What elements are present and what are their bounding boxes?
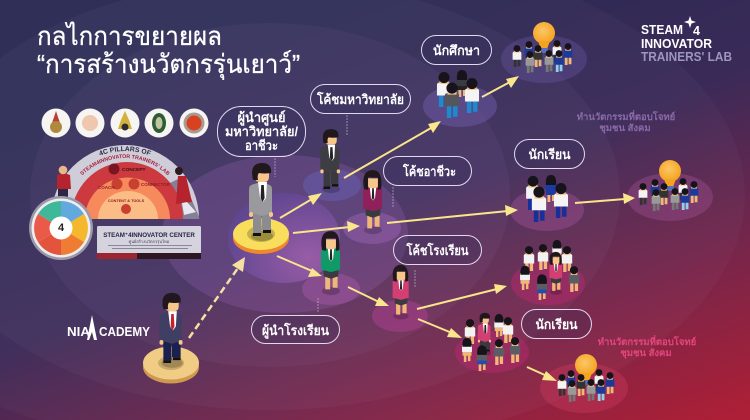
- 4C pillars semicircle: [54, 145, 200, 219]
- logo: STEAM 4 Innovator Trainers' Lab: STEAM: [641, 23, 683, 37]
- label: vocational coach: โค้ชอาชีวะ: [402, 163, 456, 179]
- title: [37, 21, 300, 80]
- label: school leader: ผู้นำโรงเรียน: [262, 322, 329, 339]
- arrows: [189, 76, 635, 381]
- label: school coach: [394, 236, 482, 264]
- caption: purple innovation note: [577, 109, 675, 134]
- STEAM 4 Innovator center board: ศูนย์สร้างนวัตกรรุ่นใหม่: [129, 239, 170, 245]
- label: students lower: นักเรียน: [536, 317, 578, 332]
- label: university students: [422, 36, 492, 64]
- STEAM 4 Innovator center board: STEAM⁺4INNOVATOR CENTER: [103, 232, 195, 239]
- coach vocational: [363, 170, 382, 234]
- school leader: [321, 231, 340, 295]
- label: students middle: [514, 140, 584, 168]
- university logos row: [42, 108, 208, 138]
- label: students lower: [522, 310, 592, 338]
- 4C pillars semicircle: COACH: [98, 185, 114, 190]
- caption: pink innovation note: ชุมชน สังคม: [620, 348, 672, 359]
- title: กลไกการขยายผล: [37, 21, 222, 51]
- center leader platform and person: [233, 163, 289, 254]
- target circles: [302, 35, 713, 413]
- caption: purple innovation note: ชุมชน สังคม: [599, 123, 651, 134]
- NIA Academy logo: NIA: [67, 325, 90, 339]
- 4C pillars semicircle: CONTENT & TOOLS: [108, 199, 145, 203]
- caption: pink innovation note: [598, 334, 696, 359]
- 4 steps wheel: [29, 196, 93, 260]
- 4C pillars semicircle: CONCEPT: [122, 167, 146, 173]
- group: school students with coach: [520, 240, 579, 300]
- label: center leader: ผู้นำศูนย์: [238, 110, 286, 126]
- label: university coach: [310, 84, 410, 114]
- label: vocational coach: [384, 156, 472, 186]
- 4 steps wheel: 4: [58, 222, 65, 234]
- innovation group middle with light bulb: [639, 160, 698, 211]
- label: school leader: [252, 316, 340, 344]
- label: center leader: [218, 106, 306, 156]
- group: school students lower: [462, 313, 520, 371]
- label: university coach: โค้ชมหาวิทยาลัย: [316, 91, 404, 107]
- group: university students: [437, 70, 479, 118]
- label: university students: นักศึกษา: [433, 43, 480, 58]
- 4C pillars semicircle: 4C PILLARS OF: [100, 146, 152, 155]
- 4C pillars semicircle: STEAM4INNOVATOR TRAINERS' LAB: [80, 154, 170, 175]
- logo: STEAM 4 Innovator Trainers' Lab: INNOVATOR: [641, 37, 712, 51]
- label: center leader: มหาวิทยาลัย/: [225, 124, 298, 139]
- NIA platform and leader: [143, 293, 199, 384]
- label connectors: [275, 115, 415, 312]
- logo: STEAM 4 Innovator Trainers' Lab: 4: [693, 24, 700, 38]
- coach university: [320, 129, 340, 193]
- STEAM 4 Innovator center board: [97, 226, 201, 259]
- title: “การสร้างนวัตกรรุ่นเยาว์”: [37, 49, 300, 80]
- NIA Academy logo: [67, 315, 151, 340]
- school coach: [393, 265, 409, 320]
- caption: purple innovation note: ทำนวัตกรรมที่ตอบโจทย์: [577, 109, 675, 123]
- label: students middle: นักเรียน: [528, 147, 571, 162]
- caption: pink innovation note: ทำนวัตกรรมที่ตอบโจทย์: [598, 334, 696, 348]
- NIA Academy logo: CADEMY: [99, 325, 151, 339]
- label: center leader: อาชีวะ: [245, 138, 278, 153]
- logo: STEAM 4 Innovator Trainers' Lab: [641, 16, 732, 64]
- innovation group bottom with light bulb: [558, 354, 614, 402]
- logo: STEAM 4 Innovator Trainers' Lab: TRAINERS' LAB: [641, 50, 732, 64]
- innovation group top with light bulb: [513, 22, 572, 73]
- group: vocational students: [526, 175, 568, 222]
- label: school coach: โค้ชโรงเรียน: [406, 242, 469, 258]
- 4C pillars semicircle: CONNECTOR: [141, 182, 171, 187]
